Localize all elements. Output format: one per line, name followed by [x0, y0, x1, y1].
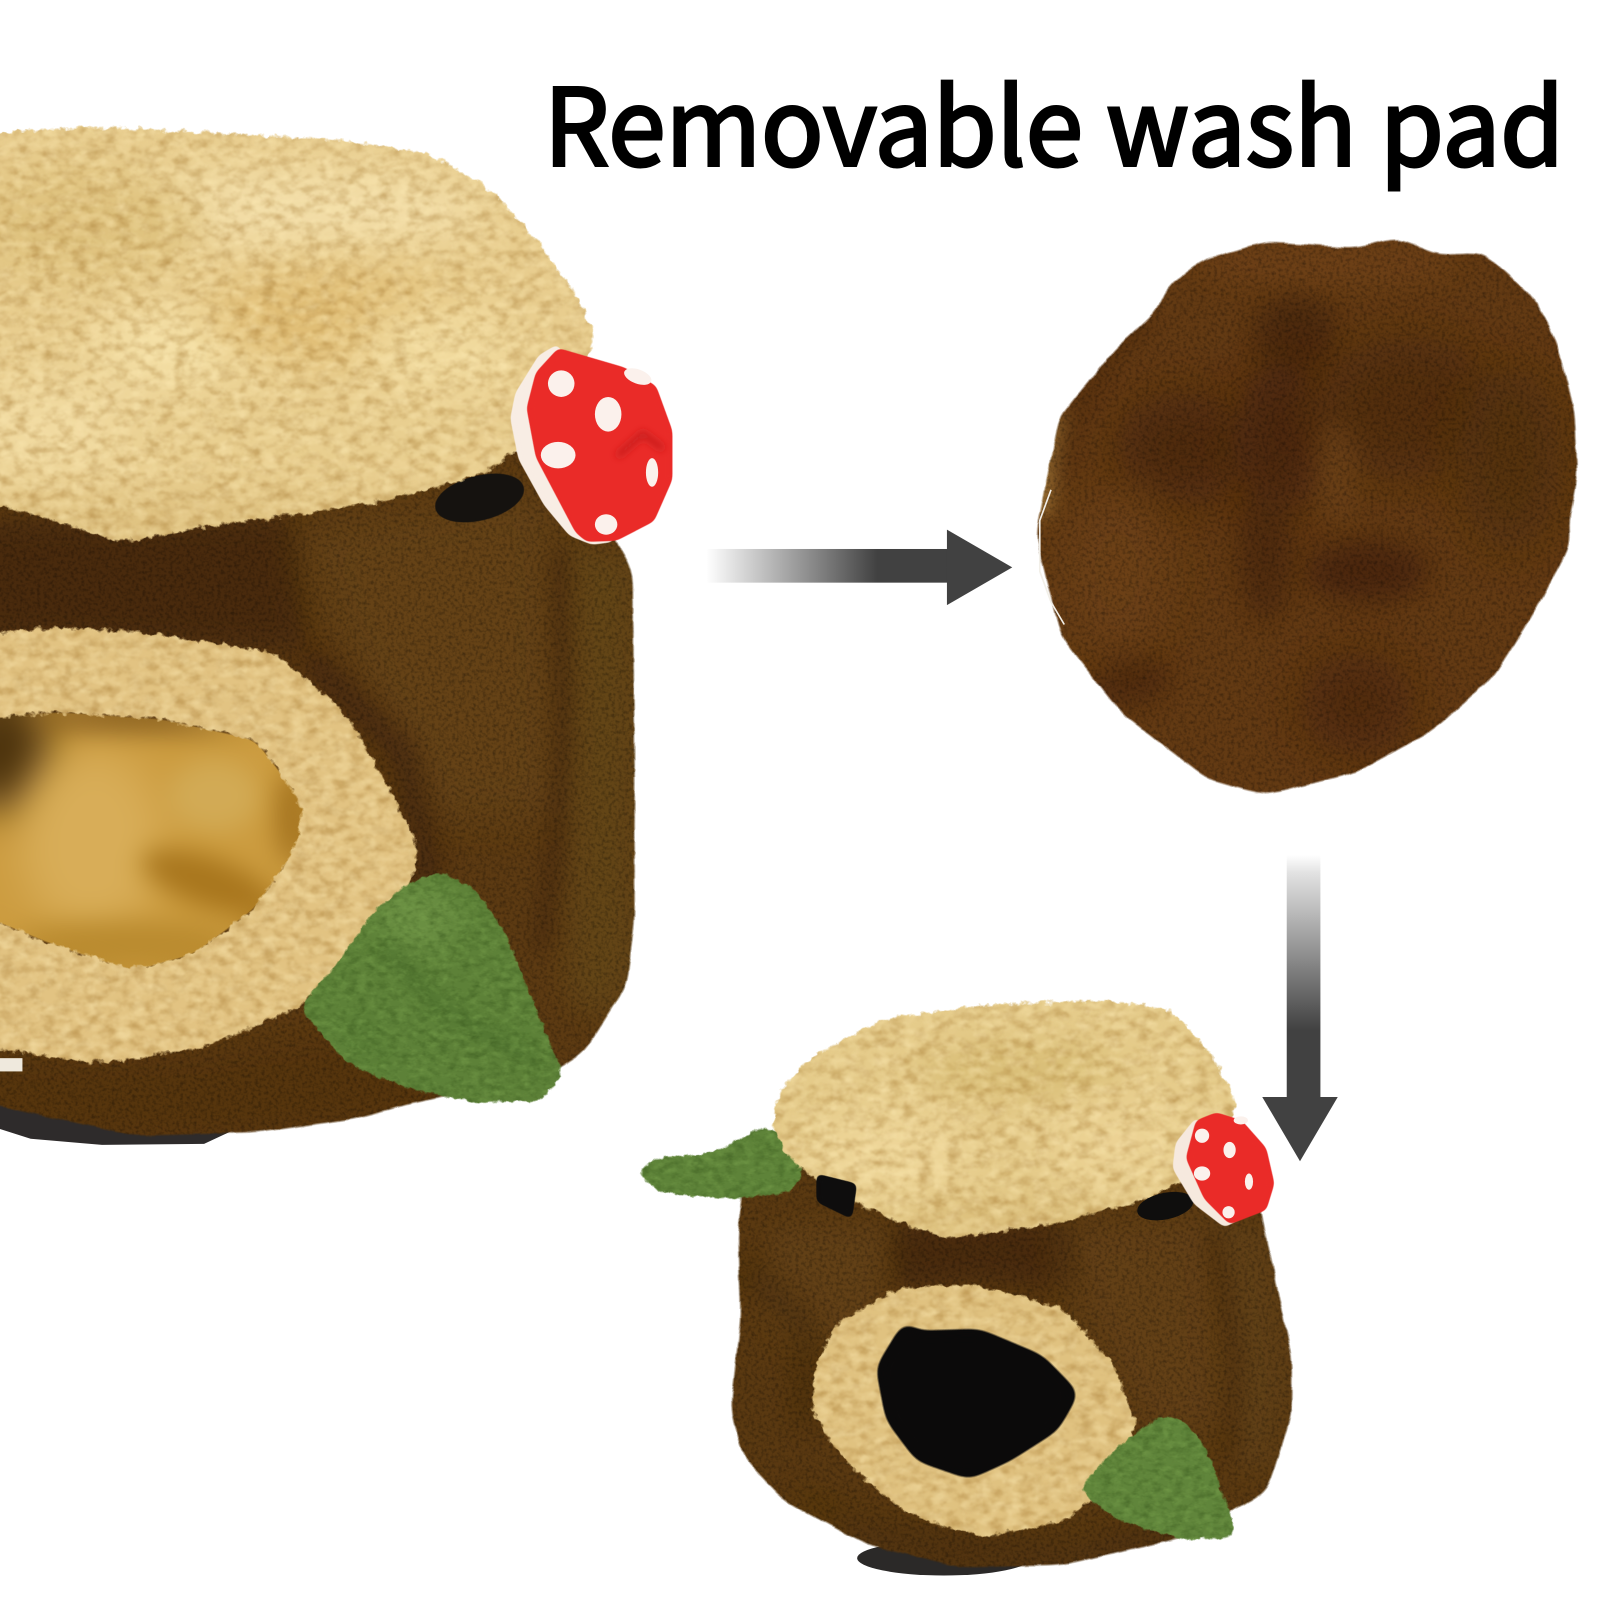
- large stump red mushroom: [510, 344, 672, 545]
- mushroom red cap: [527, 348, 672, 542]
- small stump red mushroom: [1172, 1112, 1274, 1228]
- mushroom fold: [617, 434, 663, 456]
- small stump base: [857, 1541, 1031, 1576]
- small stump black inner hole: [876, 1320, 1080, 1480]
- large stump fur top: [0, 127, 597, 545]
- removable wash pad: [1031, 238, 1578, 795]
- large stump brown body: [0, 449, 643, 1143]
- title: Removable wash pad: [544, 42, 1564, 196]
- small stump back leaf: [635, 1126, 804, 1199]
- small stump brown body: [731, 1163, 1294, 1569]
- small whole stump house: [635, 1000, 1294, 1576]
- small stump green leaf: [1078, 1412, 1238, 1540]
- large stump green leaf: [299, 871, 564, 1104]
- arrow: stump to wash pad: [706, 530, 1012, 605]
- arrow: wash pad to small stump: [1262, 855, 1338, 1161]
- pad brown plush: [1031, 238, 1578, 795]
- small mushroom white rim: [1172, 1117, 1250, 1228]
- small stump fur top: [773, 1000, 1241, 1240]
- mushroom spots: [541, 365, 658, 535]
- small mushroom red cap: [1186, 1112, 1274, 1224]
- large stump inner hole: [0, 712, 304, 969]
- pad loose white thread: [1040, 490, 1064, 624]
- black base of large stump: [0, 1082, 237, 1145]
- small stump black fastener right: [1135, 1187, 1196, 1225]
- mushroom white rim: [510, 344, 614, 545]
- small mushroom spots: [1194, 1116, 1253, 1218]
- large stump black fastener: [430, 465, 530, 531]
- small stump fur entrance ring: [812, 1285, 1138, 1537]
- small stump black fastener left: [816, 1173, 857, 1219]
- large stump house, close-up: [0, 127, 672, 1145]
- large stump fur entrance ring: [0, 612, 429, 1071]
- white tag at left edge: [0, 1058, 22, 1071]
